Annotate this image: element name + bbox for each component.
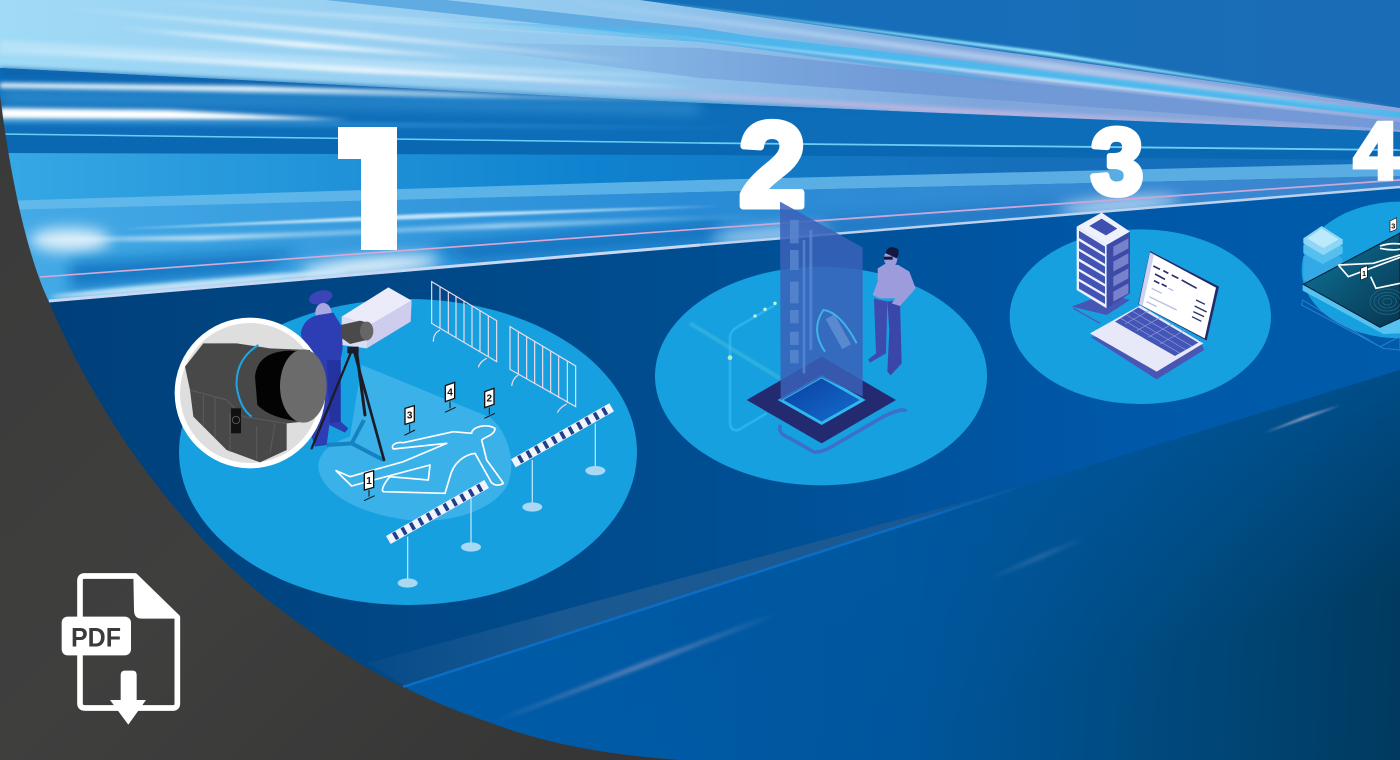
- processor chip: [747, 357, 896, 443]
- inset: scanner close-up: [175, 318, 327, 468]
- evidence marker 4: 4: [447, 388, 453, 399]
- background: light-speed streaks: [0, 0, 1400, 320]
- equipment case: [342, 287, 412, 348]
- icon: PDF download: [62, 574, 179, 725]
- tablet marker 3: 3: [1391, 221, 1395, 230]
- number 1: [338, 127, 397, 250]
- PDF label: [62, 617, 131, 655]
- laptop: [1090, 251, 1219, 379]
- document outline: [80, 576, 177, 708]
- body outline on tablet: [1338, 244, 1400, 288]
- evidence marker 2: [484, 388, 495, 418]
- platform ellipse 1: [179, 299, 637, 605]
- holographic screen: [780, 202, 863, 401]
- barrier stands: [398, 423, 605, 588]
- striped barrier rear: [513, 407, 612, 463]
- panel: step 1 crime scene: [175, 282, 637, 605]
- platform ellipse 3: [1010, 229, 1271, 404]
- folded corner: [133, 574, 179, 619]
- download arrow: [110, 671, 146, 725]
- fingerprint: [1370, 289, 1400, 314]
- dark corner curve: [0, 95, 680, 760]
- tripod: [312, 347, 384, 460]
- officer with sunglasses: [868, 247, 916, 375]
- scan spotlight: [318, 365, 511, 521]
- number 3: 3: [1091, 109, 1143, 214]
- upper light wedge: [0, 0, 1400, 132]
- floating chip layers: [1303, 226, 1343, 287]
- evidence marker 4: [445, 382, 456, 412]
- evidence marker 3: [404, 406, 415, 435]
- PDF label: PDF: [71, 622, 121, 652]
- tablet body: [1303, 218, 1400, 334]
- evidence marker 3: 3: [407, 411, 413, 422]
- scanner on tripod: [341, 321, 373, 344]
- panel: step 2 data processing: [655, 202, 987, 485]
- officer: [301, 288, 348, 447]
- panel: step 4 tablet: [1302, 202, 1400, 350]
- tripod shadow: [327, 420, 383, 460]
- lower floor panel: [407, 370, 1400, 760]
- laptop screen text lines: [1153, 266, 1207, 321]
- evidence marker 1: [364, 471, 375, 501]
- striped barrier front: [388, 484, 487, 540]
- floor: [0, 187, 1400, 760]
- evidence marker 2: 2: [487, 394, 493, 405]
- number 1: 1: [335, 91, 441, 303]
- evidence marker 1: 1: [366, 476, 372, 487]
- circuit traces: [690, 302, 906, 452]
- tablet marker 1: 1: [1362, 269, 1366, 278]
- fence panels: [432, 282, 576, 413]
- platform ellipse 4: [1302, 202, 1400, 338]
- server tower: [1072, 213, 1130, 323]
- reflection outline: [1302, 300, 1400, 350]
- number 4: 4: [1354, 106, 1399, 195]
- platform ellipse 2: [655, 267, 987, 485]
- number 2: 2: [739, 98, 806, 232]
- body outline: [336, 426, 503, 493]
- panel: step 3 server and laptop: [1010, 213, 1271, 404]
